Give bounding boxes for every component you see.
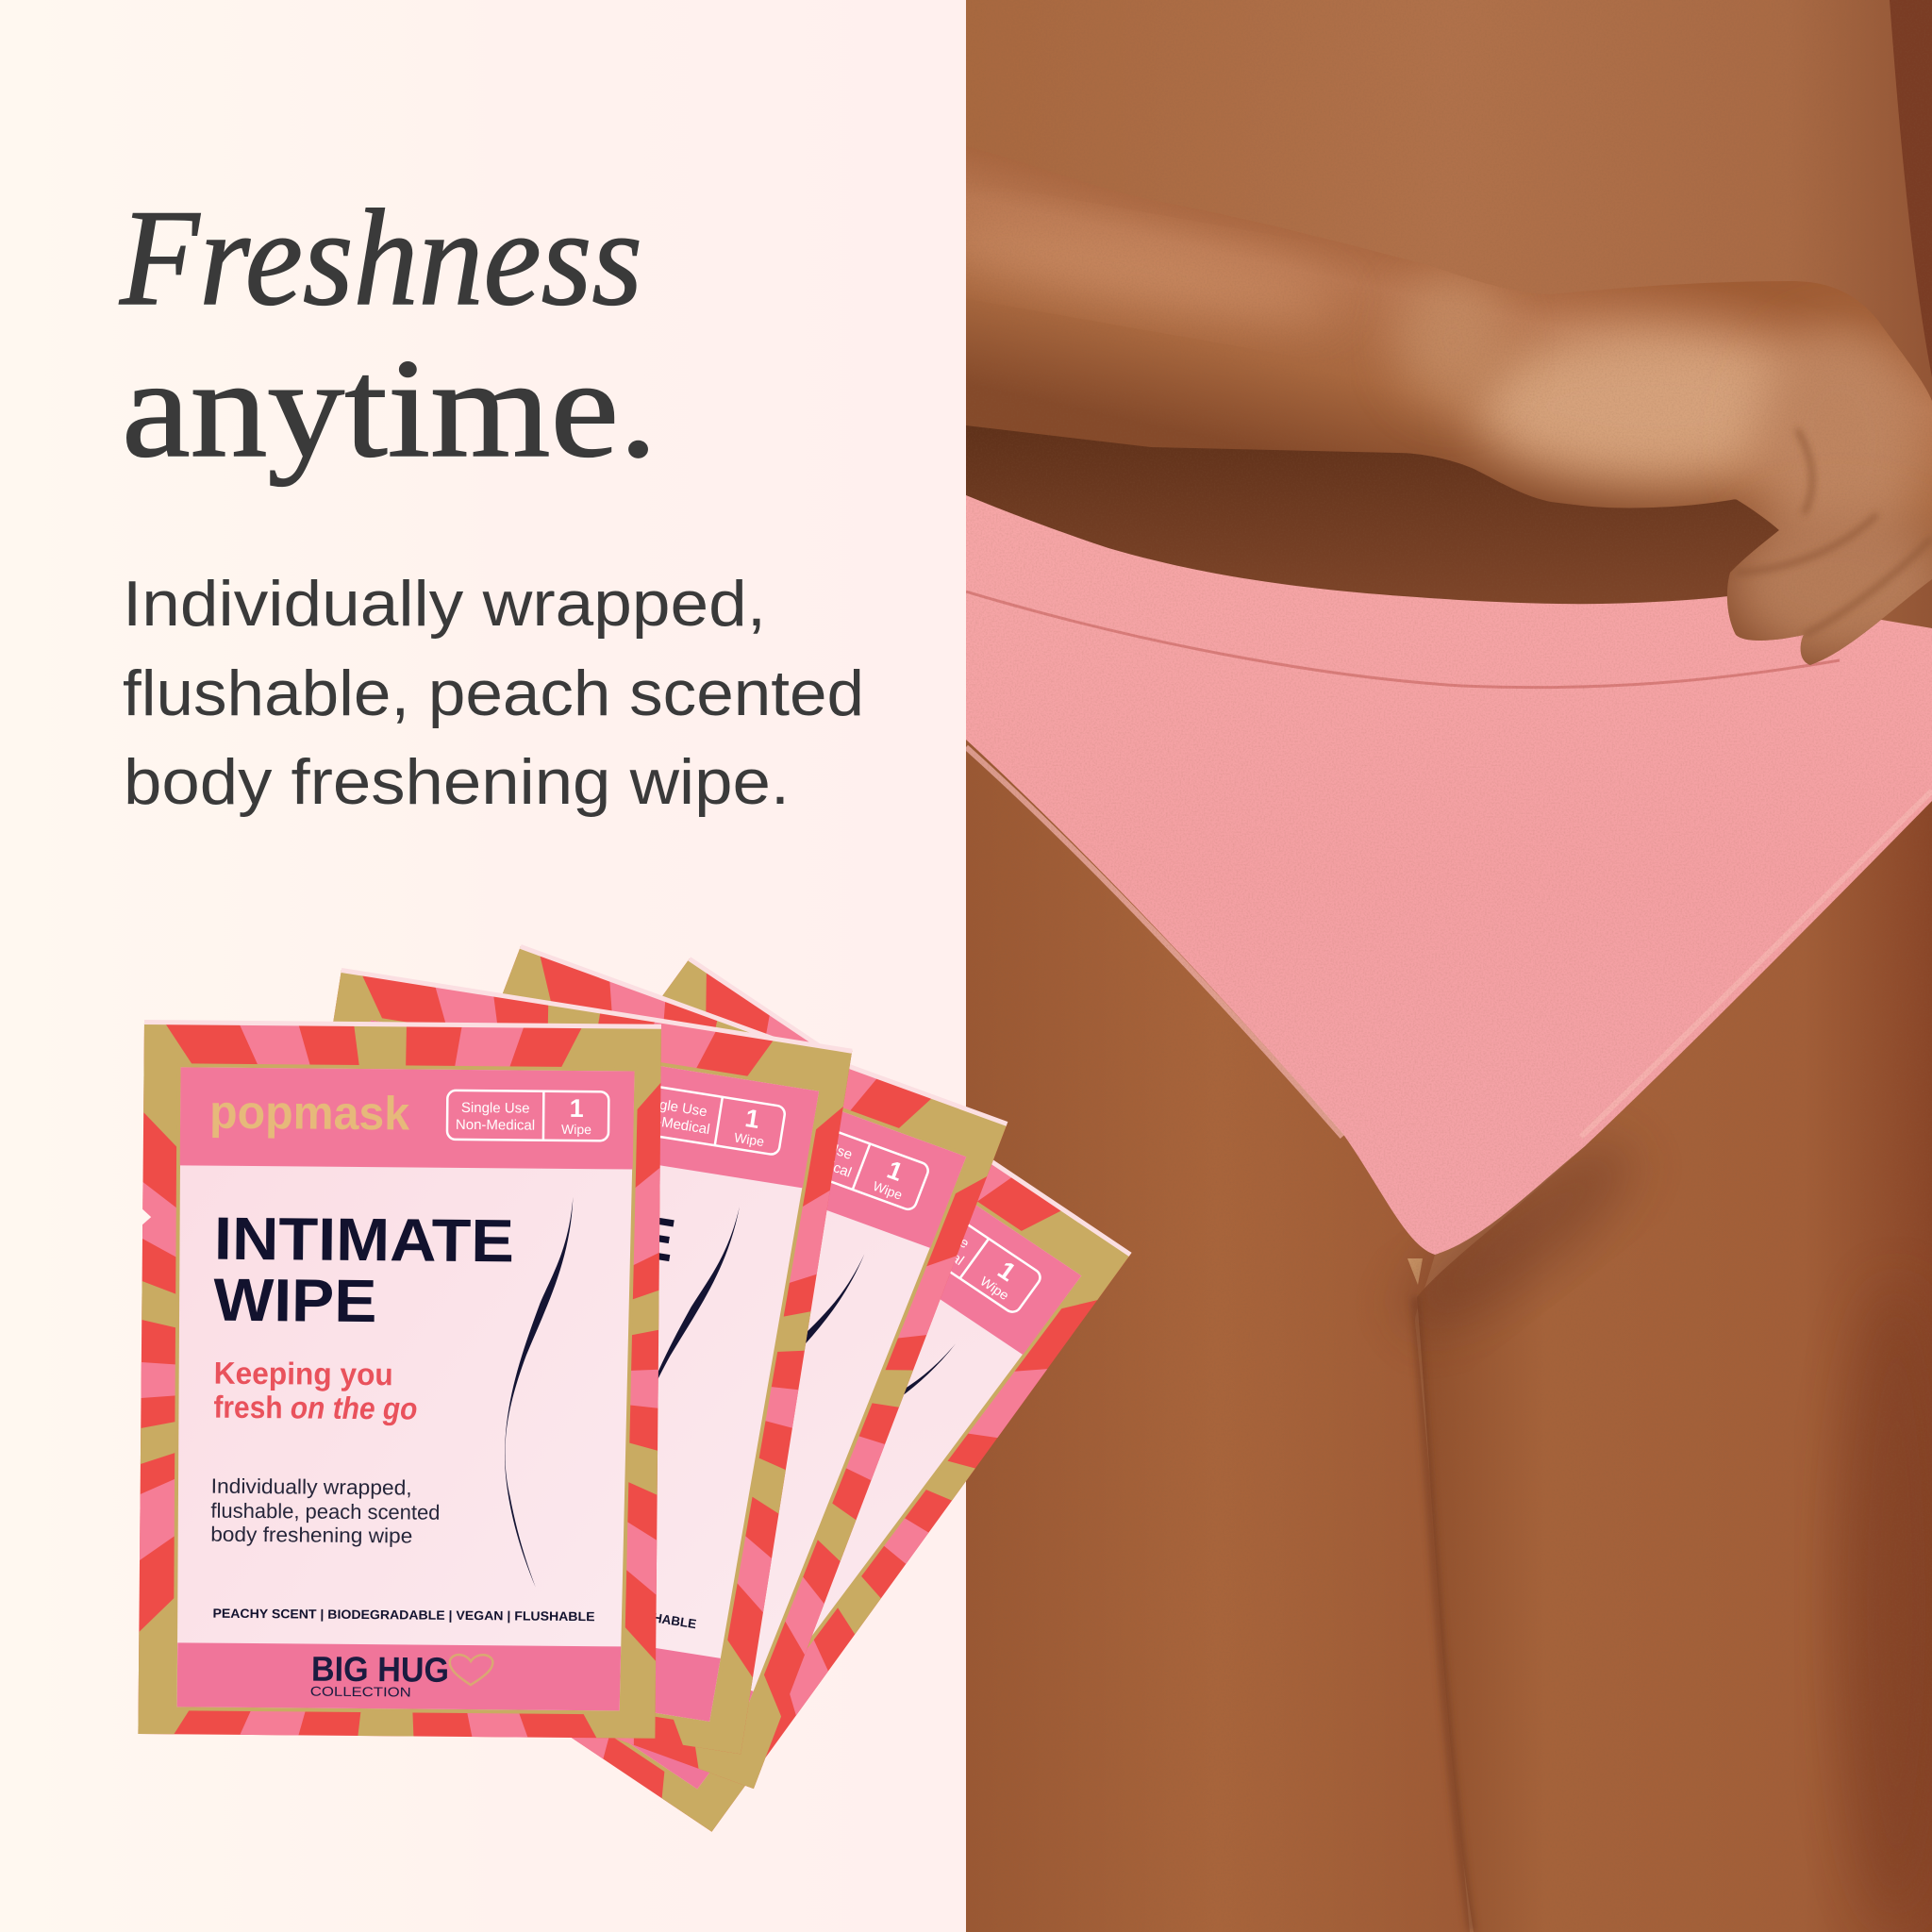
finger creases <box>1736 429 1932 635</box>
sachet 4 (rearmost): Single Use <box>905 1200 972 1252</box>
sachet 4 (rearmost): Non-Medical <box>890 1210 967 1269</box>
sachet title <box>213 1205 514 1336</box>
sachet 3: Wipe <box>871 1178 905 1203</box>
sachet 2 <box>230 968 853 1754</box>
sachet 2: FLUSHABLE <box>619 1606 697 1631</box>
heading <box>119 181 658 487</box>
sachet 3: Non-Medical <box>774 1139 854 1181</box>
inner thigh crease <box>1415 1297 1472 1932</box>
sachet title: INTIMATE <box>214 1205 514 1274</box>
sachet 2: 1 <box>743 1104 761 1134</box>
single use badge: Wipe <box>561 1122 591 1137</box>
waistband seam <box>966 591 1840 688</box>
single use badge: Non-Medical <box>456 1117 535 1134</box>
sachet 2: Non-Medical <box>630 1109 711 1138</box>
product: fan of wipe sachets <box>137 944 1132 1832</box>
sachet tagline <box>213 1356 418 1426</box>
heading: Freshness <box>119 181 642 334</box>
single use badge: 1 <box>570 1094 584 1123</box>
forearm and hand <box>966 172 1932 665</box>
shadow below the arm <box>966 425 1779 604</box>
sachet 1 (front) <box>137 1020 661 1739</box>
body text: body freshening wipe. <box>124 746 790 818</box>
left thigh <box>966 726 1470 1932</box>
sachet 3: 1 <box>883 1156 907 1187</box>
sachet 2: INTIMATE <box>374 1161 680 1274</box>
sachet 3 <box>267 944 1008 1789</box>
sachet description <box>210 1474 441 1548</box>
sachet tagline: Keeping you <box>214 1356 393 1391</box>
sachet 4 (rearmost) <box>271 957 1132 1832</box>
photo panel: model torso in pink briefs, abstracted <box>922 0 1932 1932</box>
right thigh <box>1417 801 1932 1932</box>
brand logo: popmask <box>209 1086 410 1140</box>
sachet 4 (rearmost): Wipe <box>977 1274 1011 1304</box>
sachet 4 (rearmost): 1 <box>992 1256 1022 1287</box>
single use badge: Single Use <box>461 1100 530 1117</box>
sachet 3: Single Use <box>785 1124 855 1163</box>
sachet tagline: fresh on the go <box>213 1390 418 1426</box>
leg hem left <box>966 747 1342 1137</box>
skin and fabric grain <box>966 0 1932 1932</box>
left panel background <box>0 0 966 1932</box>
sachet title: WIPE <box>213 1266 377 1335</box>
collection logo: BIG HUG <box>311 1650 449 1690</box>
sachet description: Individually wrapped, <box>211 1474 412 1499</box>
heading: anytime. <box>122 330 658 487</box>
body text <box>123 568 864 818</box>
collection logo <box>310 1650 492 1700</box>
pink briefs <box>966 495 1932 1255</box>
sachet description: flushable, peach scented <box>210 1499 441 1524</box>
single use badge <box>447 1091 608 1141</box>
leg hem right <box>1581 791 1932 1137</box>
feature line: PEACHY SCENT | BIODEGRADABLE | VEGAN | FLUSHABLE <box>212 1607 595 1624</box>
sachet 2: Single Use <box>638 1093 708 1120</box>
collection logo: COLLECTION <box>310 1684 411 1699</box>
sachet description: body freshening wipe <box>210 1523 412 1548</box>
body text: Individually wrapped, <box>123 568 766 640</box>
body text: flushable, peach scented <box>123 658 864 729</box>
sachet 2: Wipe <box>733 1129 765 1149</box>
